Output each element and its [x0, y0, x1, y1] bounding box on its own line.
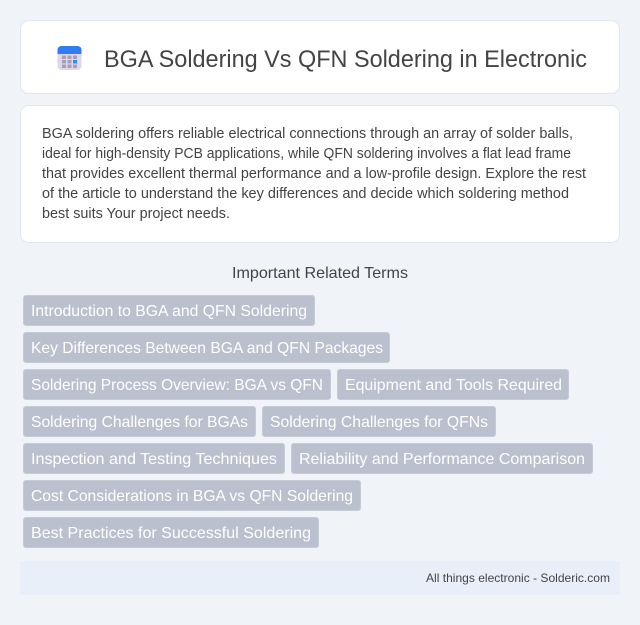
tag: best practices: Best Practices for Successful Soldering	[31, 525, 311, 542]
icon: calendar grid	[58, 46, 82, 70]
tag: process overview: Soldering Process Overview: BGA vs QFN	[31, 377, 323, 394]
panel: header	[20, 20, 620, 94]
tag: reliability: Reliability and Performance Comparison	[299, 451, 585, 468]
footer credit: All things electronic - Solderic.com	[426, 571, 610, 585]
text block: summary paragraph	[42, 126, 586, 222]
tag: equipment: Equipment and Tools Required	[345, 377, 562, 394]
tag: QFN challenges	[262, 406, 496, 436]
tag: cost: Cost Considerations in BGA vs QFN Soldering	[31, 488, 353, 505]
tag: introduction	[24, 296, 314, 326]
tag: BGA challenges	[24, 406, 256, 436]
tag: QFN challenges: Soldering Challenges for QFNs	[270, 414, 488, 431]
text block: summary paragraph: of the article to understand the key differences and decide which soldering method	[42, 186, 569, 202]
heading: related terms: Important Related Terms	[232, 265, 408, 282]
tag: introduction: Introduction to BGA and QFN Soldering	[31, 303, 307, 320]
footer	[20, 561, 620, 595]
panel: summary	[20, 106, 620, 242]
text block: summary paragraph: BGA soldering offers reliable electrical connections through an array of solder balls,	[42, 126, 573, 142]
tag: reliability	[292, 444, 592, 474]
tag list: related terms	[24, 296, 592, 548]
tag: inspection: Inspection and Testing Techniques	[31, 451, 277, 468]
text block: summary paragraph: that provides excellent thermal performance and a low-profile design. Explore the rest	[42, 166, 586, 182]
tag: key differences	[24, 332, 390, 362]
text block: summary paragraph: best suits Your project needs.	[42, 206, 230, 222]
tag: cost	[24, 480, 360, 510]
tag: key differences: Key Differences Between BGA and QFN Packages	[31, 340, 383, 357]
tag: inspection	[24, 444, 284, 474]
tag: process overview	[24, 370, 330, 400]
title: BGA Soldering Vs QFN Soldering in Electronic	[104, 46, 587, 73]
tag: equipment	[338, 370, 568, 400]
tag: best practices	[24, 518, 318, 548]
text block: summary paragraph: ideal for high-density PCB applications, while QFN soldering involves a flat lead frame	[42, 146, 571, 162]
tag: BGA challenges: Soldering Challenges for BGAs	[31, 414, 248, 431]
